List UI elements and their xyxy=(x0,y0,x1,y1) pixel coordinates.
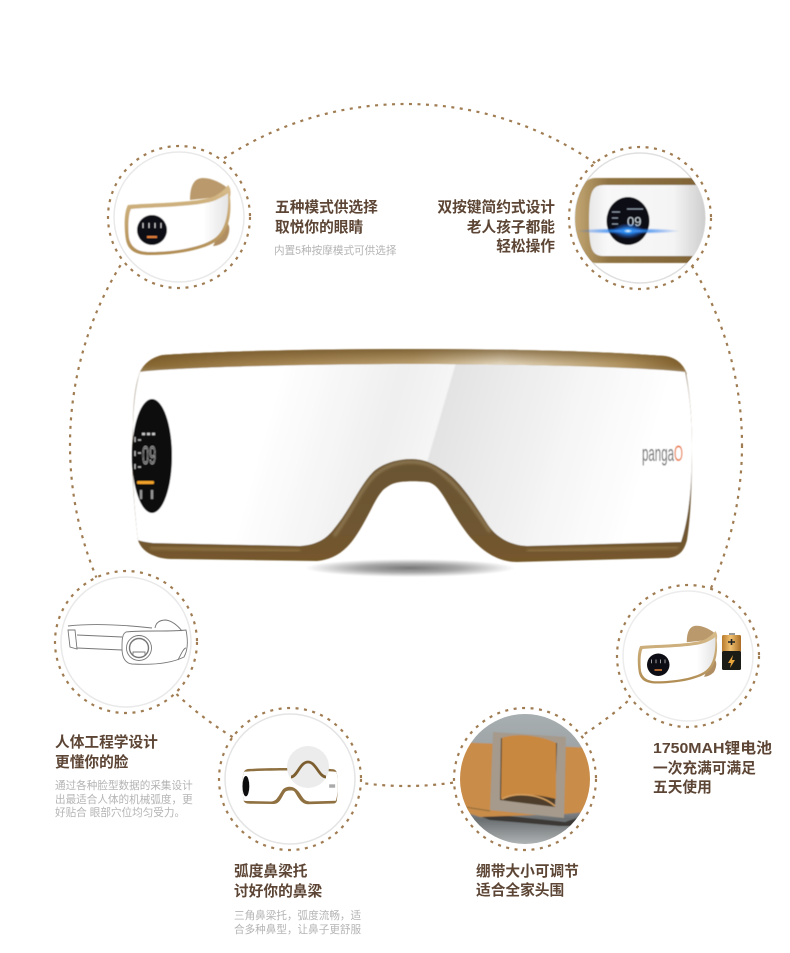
heading: 老人孩子都能 xyxy=(467,218,555,236)
status row xyxy=(142,433,155,435)
callout: two-button design xyxy=(437,147,711,289)
round badge xyxy=(219,708,361,850)
heading xyxy=(55,733,158,771)
round badge xyxy=(569,147,711,289)
heading: 人体工程学设计 xyxy=(55,733,158,751)
heading: 弧度鼻梁托 xyxy=(234,862,308,880)
product 3/4 view xyxy=(638,626,717,684)
heading xyxy=(437,198,555,255)
heading: 讨好你的鼻梁 xyxy=(234,882,322,900)
infographic canvas xyxy=(54,102,772,934)
heading xyxy=(653,739,772,796)
goggle shell band xyxy=(132,349,692,562)
top band shading xyxy=(139,349,687,374)
round badge xyxy=(454,708,596,850)
description: 三角鼻梁托，弧度流畅，适 xyxy=(234,909,362,922)
description xyxy=(55,779,193,819)
heading: 绷带大小可调节 xyxy=(476,862,579,880)
digit read-out: 09 xyxy=(142,442,156,470)
callout: nose bridge xyxy=(219,708,362,936)
nose bridge highlight xyxy=(334,462,490,536)
screen digits: 09 xyxy=(627,214,641,229)
magnifier on nose bridge xyxy=(287,746,329,788)
heading: 取悦你的眼睛 xyxy=(275,218,363,236)
product 3/4 view xyxy=(125,178,231,255)
callout: ergonomic design xyxy=(55,571,197,819)
lower band highlight xyxy=(150,547,678,551)
mode icons xyxy=(135,437,141,469)
description: 内置5种按摩模式可供选择 xyxy=(274,244,397,257)
round badge xyxy=(55,571,197,713)
callout: adjustable strap xyxy=(454,708,596,899)
blue light flare xyxy=(576,228,680,234)
description: 出最适合人体的机械弧度，更 xyxy=(55,793,193,806)
icon: battery xyxy=(722,633,741,670)
heading xyxy=(234,862,322,900)
heading: 轻松操作 xyxy=(496,237,555,255)
touch buttons xyxy=(141,490,152,499)
strap and buckle photo xyxy=(460,714,590,844)
miniature product xyxy=(242,768,338,804)
orange indicator bar xyxy=(137,481,154,484)
floor shadow xyxy=(305,559,515,577)
big dotted orbit connecting the callouts xyxy=(70,104,742,786)
heading: 双按键简约式设计 xyxy=(437,198,555,216)
LCD control panel xyxy=(132,399,172,513)
round badge xyxy=(617,585,759,727)
main product: eye massager xyxy=(132,349,692,577)
brand logo: pangaO xyxy=(642,441,683,466)
callout: battery xyxy=(617,585,772,796)
description xyxy=(234,909,362,936)
heading xyxy=(275,198,378,236)
heading: 五种模式供选择 xyxy=(275,198,378,216)
description: 通过各种脸型数据的采集设计 xyxy=(55,779,193,792)
heading xyxy=(476,862,579,899)
heading: 适合全家头围 xyxy=(476,881,564,899)
description: 好贴合 眼部穴位均匀受力。 xyxy=(55,806,185,819)
metal buckle xyxy=(490,732,566,818)
top gold band xyxy=(139,349,687,374)
callout: five modes xyxy=(108,146,397,288)
heading: 1750MAH锂电池 xyxy=(653,739,772,757)
description: 合多种鼻型，让鼻子更舒服 xyxy=(234,923,362,936)
close-up of the display xyxy=(575,178,710,263)
heading: 五天使用 xyxy=(653,778,712,796)
white face of the shell xyxy=(133,364,692,546)
round badge xyxy=(108,146,250,288)
heading: 一次充满可满足 xyxy=(653,759,756,777)
line drawing of product xyxy=(68,620,187,664)
heading: 更懂你的脸 xyxy=(55,753,129,771)
blue flare core xyxy=(612,223,644,239)
strap loop xyxy=(501,735,556,799)
